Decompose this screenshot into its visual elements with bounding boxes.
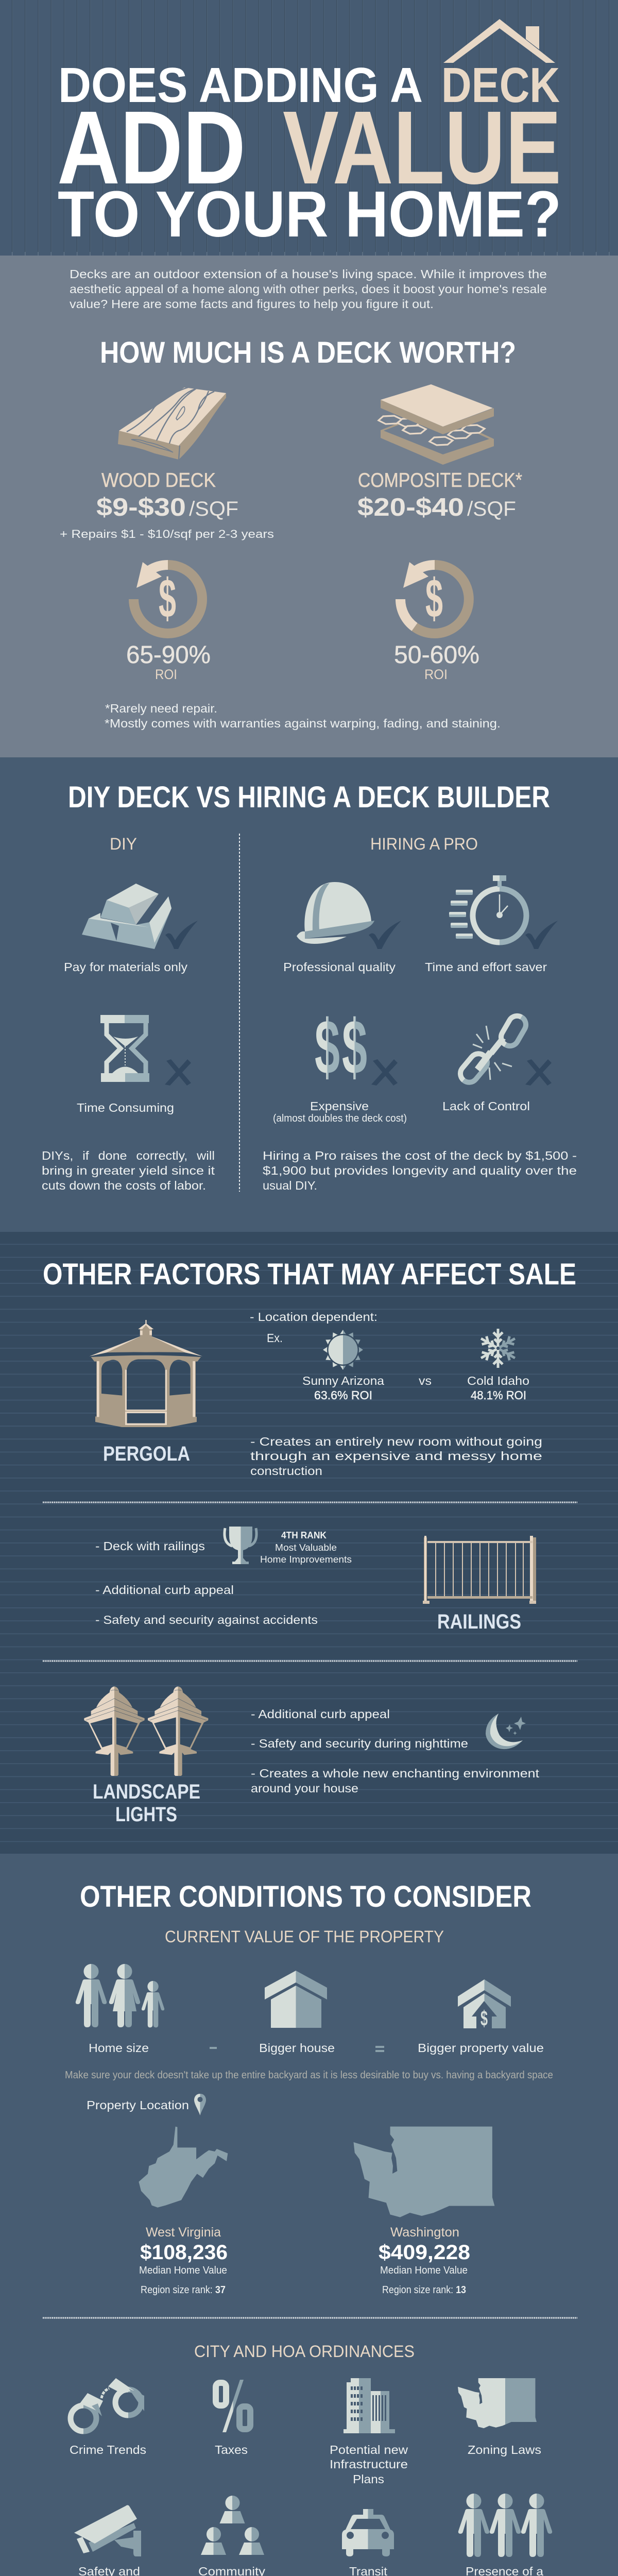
icon: ROI ring 50-60: $: [425, 567, 443, 629]
label: expensive: (almost doubles the deck cost): [273, 1113, 407, 1124]
text: pro summary: [263, 1149, 577, 1192]
label: Sunny Arizona: Sunny Arizona: [302, 1374, 384, 1387]
text: creates a new room: through an expensive and messy home: [250, 1449, 542, 1463]
title line 2: [57, 89, 561, 206]
title line 1: DOES ADDING A: [58, 58, 423, 113]
label: bigger property value: Bigger property value: [418, 2041, 544, 2055]
icon: lamp right: [148, 1686, 208, 1776]
stats: West Virginia: [139, 2225, 228, 2296]
label: crime trends: Crime Trends: [70, 2443, 146, 2456]
icon: wood plank: [118, 387, 226, 460]
label: time and effort saver: Time and effort saver: [425, 960, 547, 974]
price: wood deck: $9-$30: [96, 494, 186, 521]
text: enchanting environment: - Creates a whole new enchanting environment: [251, 1767, 540, 1780]
label: infrastructure plans: Infrastructure: [330, 2458, 408, 2471]
label: Cold Idaho: Cold Idaho: [467, 1374, 529, 1387]
label: rank callout: 4TH RANK: [281, 1530, 327, 1540]
icon: hard hat with check: [297, 882, 401, 949]
stats: West Virginia: West Virginia: [146, 2225, 221, 2240]
stats: Washington: Region size rank: 13: [382, 2284, 466, 2296]
price: composite deck: /SQF: [467, 498, 516, 520]
icon: ROI ring 65-90: [134, 562, 202, 634]
icon: zoning map: [458, 2378, 537, 2428]
title block: [57, 19, 561, 250]
price: composite deck: [357, 494, 516, 521]
panel: landscape lights: [84, 1686, 540, 1826]
label: property location: Property Location: [87, 2098, 189, 2112]
icon: trophy: [225, 1527, 256, 1564]
text: enchanting environment: [251, 1767, 540, 1795]
map: Washington: [353, 2127, 494, 2217]
icon: railing: [423, 1536, 536, 1604]
icon: ROI ring 65-90: $: [159, 567, 176, 629]
intro paragraph: [70, 267, 547, 311]
subheading: city and HOA: CITY AND HOA ORDINANCES: [194, 2342, 415, 2361]
text: additional curb appeal: - Additional curb appeal: [251, 1707, 390, 1721]
label: composite deck: COMPOSITE DECK*: [358, 469, 522, 492]
subheading: DIY: DIY: [110, 835, 137, 853]
stats: West Virginia: $108,236: [140, 2241, 228, 2264]
label: landscape lights: [93, 1781, 200, 1826]
text: deck with railings: - Deck with railings: [95, 1539, 205, 1553]
text: safety at night: - Safety and security during nighttime: [251, 1737, 468, 1750]
icon: composite layers: [379, 384, 494, 465]
label: expensive: Expensive: [310, 1099, 369, 1113]
stats: West Virginia: Region size rank: 37: [141, 2284, 226, 2296]
text: DIY summary: cuts down the costs of labor.: [42, 1179, 206, 1192]
stat: composite ROI: 50-60%: [394, 641, 479, 669]
intro paragraph: Decks are an outdoor extension of a house's living space. While it improves the: [70, 267, 547, 281]
note: repairs cost: + Repairs $1 - $10/sqf per 2-3 years: [60, 528, 274, 540]
text: location dependent: - Location dependent:: [250, 1310, 377, 1324]
text: creates a new room: [250, 1435, 542, 1478]
panel: home size equation: [76, 1964, 544, 2055]
label: bigger house: Bigger house: [259, 2041, 335, 2055]
label: rank callout: Most Valuable: [275, 1543, 337, 1553]
label: Sunny Arizona: [302, 1374, 384, 1402]
title line 2: VALUE: [283, 89, 561, 206]
text: creates a new room: construction: [250, 1464, 322, 1478]
price: composite deck: $20-$40: [357, 494, 464, 521]
label: time consuming: Time Consuming: [77, 1101, 174, 1114]
stat: composite ROI: [394, 641, 479, 682]
symbol: equals: [375, 2046, 384, 2052]
icon: stopwatch with check: [449, 875, 558, 949]
icon: ROI ring 50-60: [400, 562, 469, 633]
label: example: Ex.: [267, 1331, 283, 1345]
label: Sunny Arizona: 63.6% ROI: [314, 1388, 372, 1402]
icon: pergola gazebo: [89, 1320, 202, 1427]
panel: DIY: [42, 884, 215, 1192]
icon: hourglass with cross: [100, 1015, 191, 1086]
text: additional curb appeal: - Additional curb appeal: [95, 1583, 234, 1597]
section background: DIY vs hiring: [0, 757, 618, 1232]
label: expensive: [273, 1099, 407, 1124]
footnotes: *Mostly comes with warranties against warping, fading, and staining.: [105, 717, 501, 730]
text: safety against accidents: - Safety and security against accidents: [95, 1613, 318, 1626]
title line 1: DECK: [441, 58, 560, 113]
heading: DIY vs hiring: DIY DECK VS HIRING A DECK BUILDER: [68, 781, 550, 814]
subheading: hiring a pro: HIRING A PRO: [370, 835, 478, 853]
section background: header: [0, 0, 618, 256]
stat: composite ROI: ROI: [424, 667, 448, 682]
footnotes: [105, 702, 501, 730]
stats: West Virginia: Median Home Value: [139, 2265, 227, 2276]
text: DIY summary: bring in greater yield since it: [42, 1164, 215, 1177]
note: backyard: Make sure your deck doesn't take up the entire backyard as it is less desirable to buy vs. having a backyard space: [65, 2070, 553, 2081]
label: wood deck: WOOD DECK: [101, 469, 216, 492]
text: pro summary: usual DIY.: [263, 1179, 317, 1192]
panel: railings: [95, 1527, 536, 1633]
label: railings: RAILINGS: [437, 1611, 521, 1633]
price: wood deck: /SQF: [189, 498, 238, 520]
stat: wood ROI: ROI: [155, 667, 177, 682]
map: West Virginia: [139, 2127, 228, 2208]
text: pro summary: $1,900 but provides longevity and quality over the: [263, 1164, 577, 1177]
label: pay for materials only: Pay for materials only: [64, 960, 188, 974]
title line 2: ADD: [57, 89, 246, 206]
label: Cold Idaho: [467, 1374, 529, 1402]
panel: wood deck: [60, 387, 274, 682]
footnotes: *Rarely need repair.: [105, 702, 217, 715]
icon: map pin: [194, 2094, 206, 2115]
icon: HOA people: [458, 2494, 552, 2557]
panel: property location: [87, 2094, 494, 2296]
stat: wood ROI: [126, 641, 211, 682]
stat: wood ROI: 65-90%: [126, 641, 211, 669]
stats: Washington: [379, 2225, 470, 2296]
label: professional quality: Professional quality: [283, 960, 396, 974]
decorative vertical siding: [0, 0, 618, 256]
section background: other conditions: [0, 1854, 618, 2576]
label: home size: Home size: [89, 2041, 149, 2055]
label: taxes: Taxes: [215, 2443, 248, 2456]
label: landscape lights: LANDSCAPE: [93, 1781, 200, 1803]
panel: city and HOA grid: [70, 2378, 552, 2576]
intro paragraph: aesthetic appeal of a home along with other perks, does it boost your home's resale: [70, 282, 547, 296]
label: zoning laws: Zoning Laws: [468, 2443, 541, 2456]
label: landscape lights: LIGHTS: [115, 1803, 177, 1826]
stats: Washington: Washington: [390, 2225, 459, 2240]
icon: snowflake: [479, 1329, 517, 1368]
icon: house value: [458, 1979, 511, 2030]
label: vs: vs: [419, 1374, 432, 1387]
icon: family: [76, 1964, 164, 2027]
stats: Washington: Median Home Value: [380, 2265, 468, 2276]
symbol: tilde: [210, 2047, 217, 2049]
text: enchanting environment: around your house: [251, 1782, 358, 1795]
icon: house roof above title: [443, 19, 555, 63]
heading: other conditions: OTHER CONDITIONS TO CONSIDER: [80, 1880, 531, 1913]
stats: Washington: $409,228: [379, 2241, 470, 2264]
panel: composite deck: [357, 384, 522, 682]
label: pergola: PERGOLA: [103, 1443, 190, 1465]
text: pro summary: Hiring a Pro raises the cost of the deck by $1,500 -: [263, 1149, 577, 1162]
icon: bigger house: [265, 1971, 327, 2028]
intro paragraph: value? Here are some facts and figures to help you figure it out.: [70, 297, 434, 311]
label: rank callout: Home Improvements: [260, 1554, 352, 1565]
icon: percent: [216, 2380, 250, 2432]
label: Cold Idaho: 48.1% ROI: [471, 1388, 526, 1402]
label: lack of control: Lack of Control: [442, 1099, 530, 1113]
section background: other factors: [0, 1232, 618, 1854]
title line 3: TO YOUR HOME?: [58, 178, 561, 250]
text: DIY summary: DIYs, if done correctly, will: [42, 1149, 215, 1162]
label: rank callout: [260, 1530, 352, 1565]
icon: double dollar with cross: $: [315, 1004, 340, 1090]
text: DIY summary: [42, 1149, 215, 1192]
icon: moon and stars: [486, 1714, 526, 1749]
text: creates a new room: - Creates an entirely new room without going: [250, 1435, 542, 1448]
icon: double dollar with cross: [315, 1004, 398, 1090]
icon: community: [201, 2496, 264, 2555]
label: infrastructure plans: [330, 2443, 408, 2486]
price: wood deck: [96, 494, 238, 521]
panel: hiring a pro: [263, 875, 577, 1192]
icon: security camera: [74, 2505, 141, 2556]
label: infrastructure plans: Potential new: [330, 2443, 408, 2456]
label: infrastructure plans: Plans: [353, 2472, 384, 2486]
icon: double dollar with cross: $: [342, 1004, 367, 1090]
icon: lamp left: [84, 1686, 145, 1776]
subheading: current value: CURRENT VALUE OF THE PROPERTY: [165, 1927, 444, 1946]
icon: sun: [323, 1330, 363, 1370]
icon: buildings: [344, 2378, 395, 2433]
icon: taxi: [342, 2509, 394, 2556]
icon: handcuffs: [71, 2378, 144, 2431]
panel: pergola: [89, 1310, 542, 1478]
decorative horizontal siding: [0, 1232, 618, 1854]
section background: how much is a deck worth: [0, 256, 618, 757]
icon: gold bars with check: [82, 884, 198, 949]
icon: broken chain with cross: [457, 1013, 552, 1086]
heading: how much is a deck worth: HOW MUCH IS A DECK WORTH?: [100, 336, 516, 369]
